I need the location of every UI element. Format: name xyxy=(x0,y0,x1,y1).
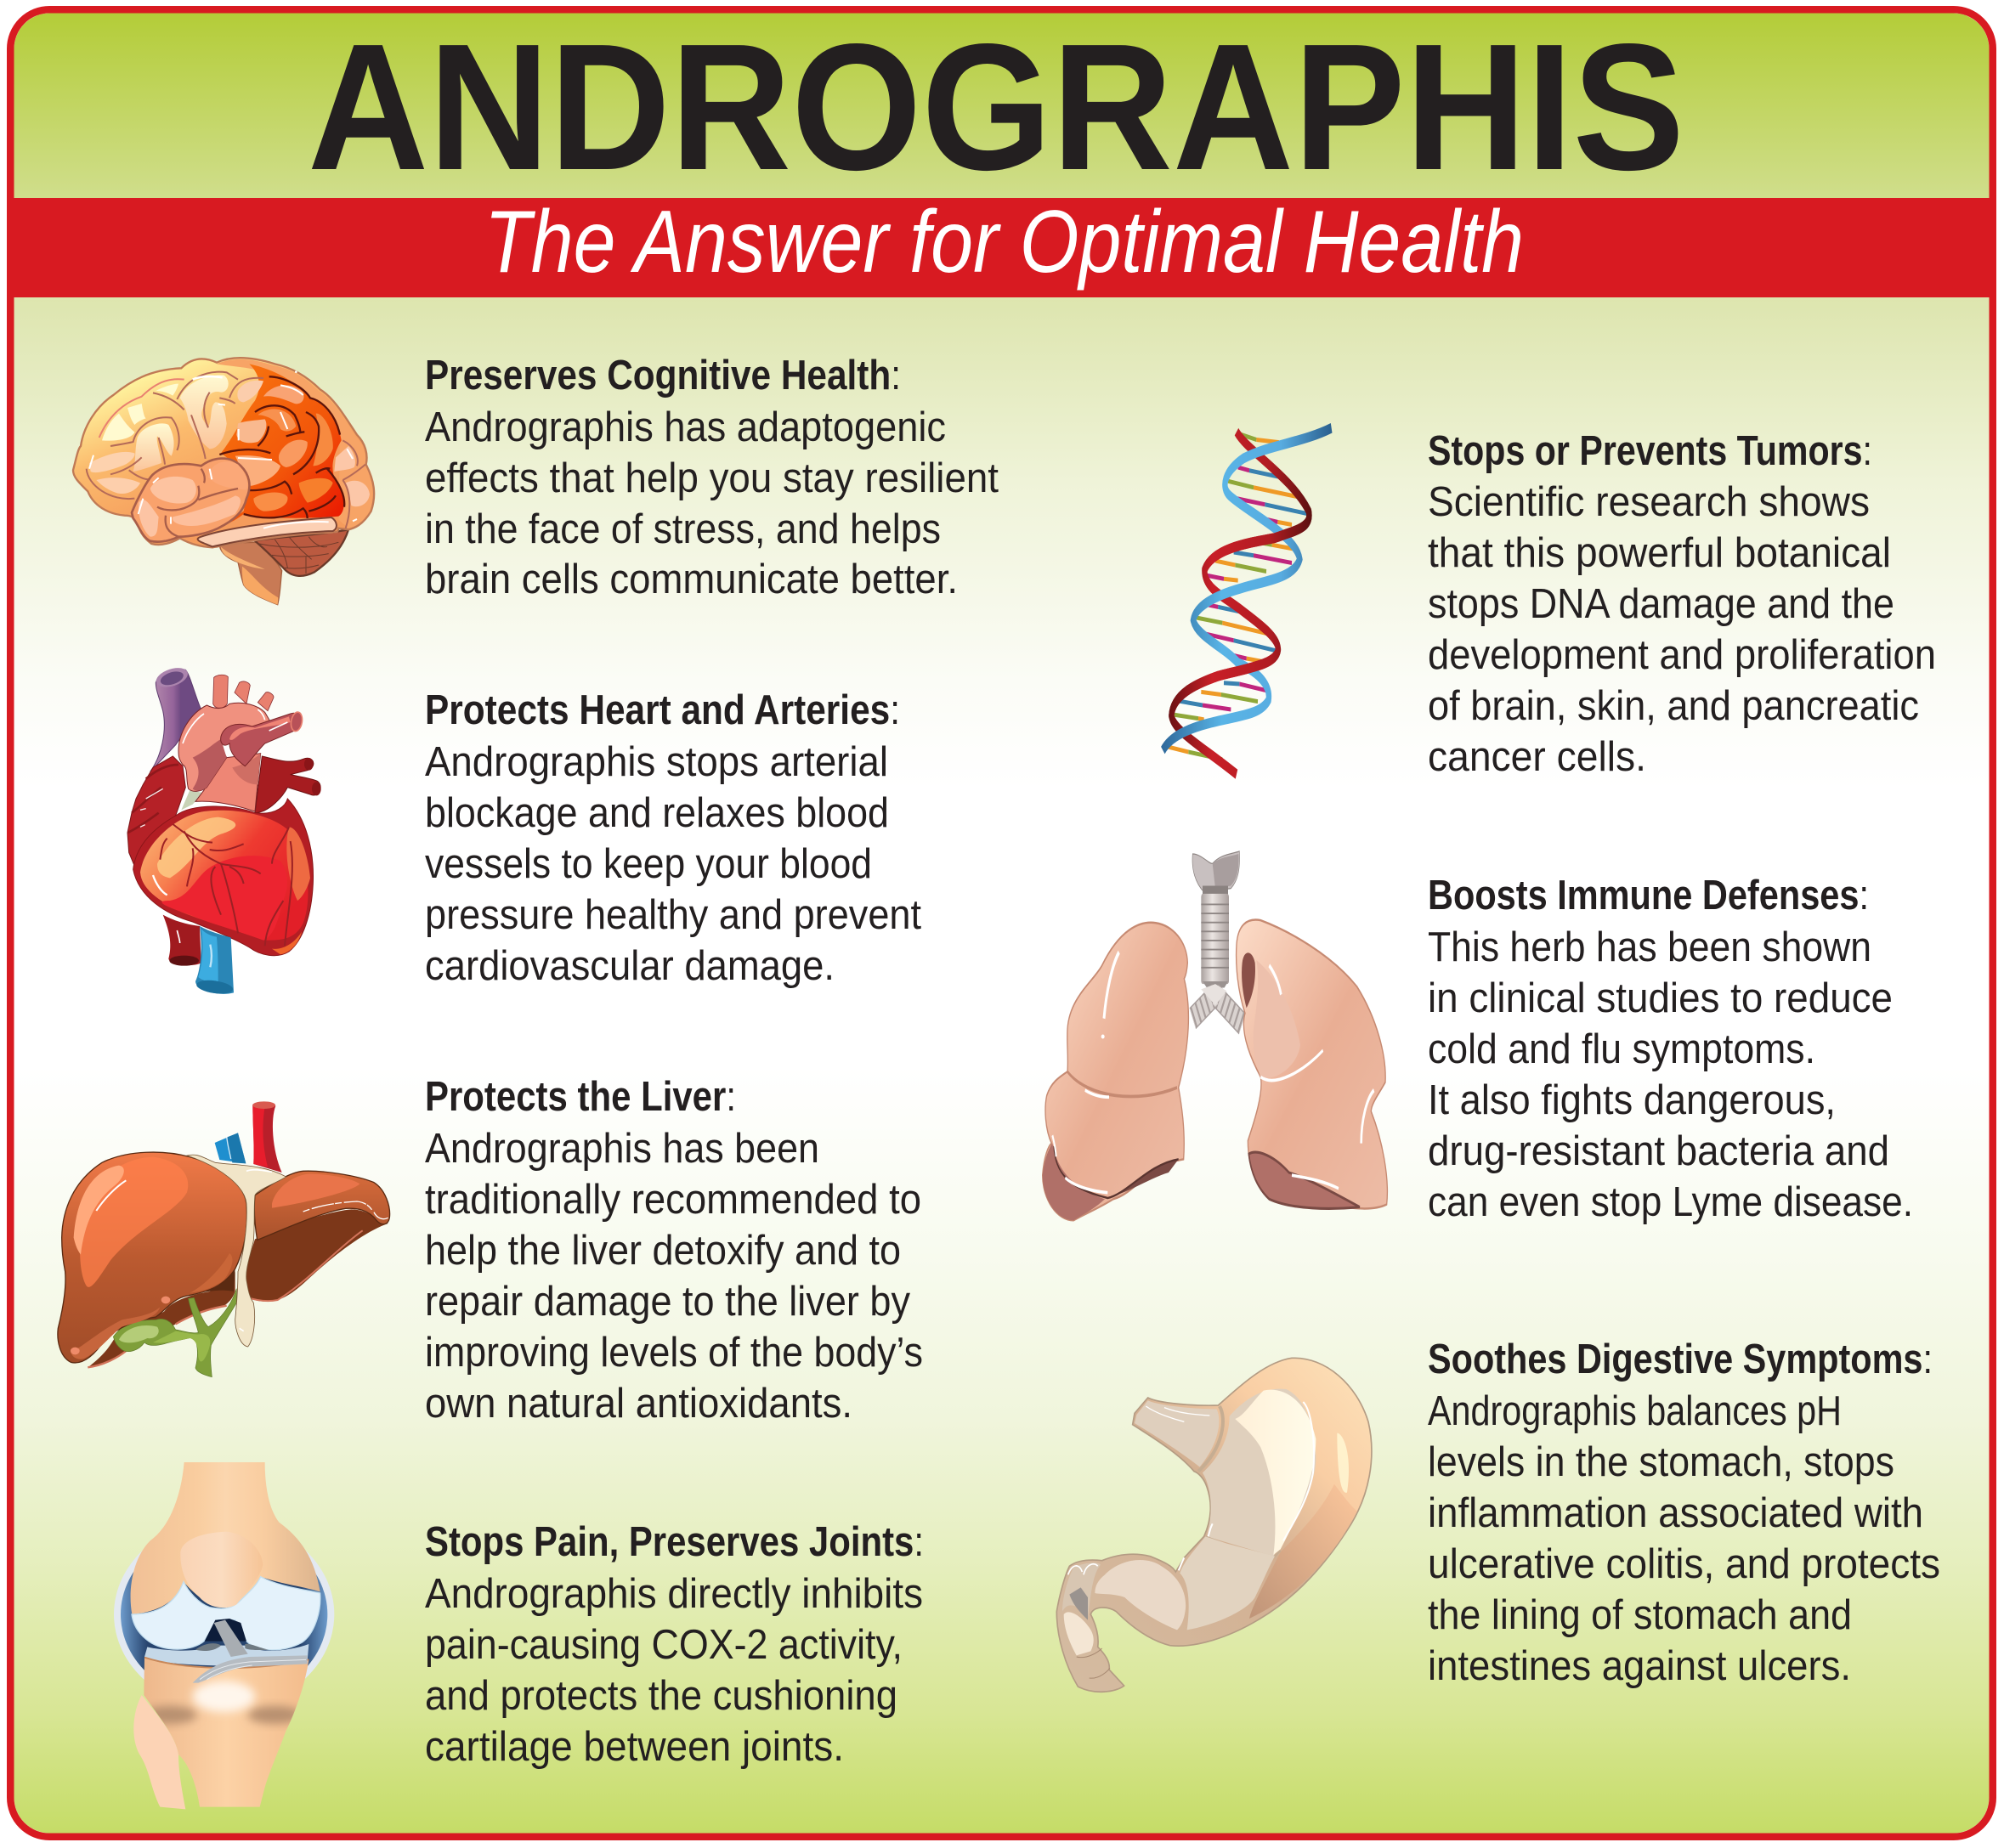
panel: immune defenses xyxy=(1043,851,1913,1225)
text: digestive symptoms xyxy=(1428,1337,1940,1689)
panel: tumors xyxy=(1163,428,1936,780)
text: heart and arteries: cardiovascular damage. xyxy=(425,943,835,989)
text: heart and arteries: blockage and relaxes blood xyxy=(425,790,889,836)
text: digestive symptoms: Andrographis balances pH xyxy=(1428,1388,1842,1434)
subtitle band: The Answer for Optimal Health xyxy=(484,193,1524,291)
subtitle band xyxy=(7,193,1996,297)
text: joints: pain-causing COX-2 activity, xyxy=(425,1622,903,1668)
text: heart and arteries: vessels to keep your blood xyxy=(425,841,872,887)
text: digestive symptoms: ulcerative colitis, and protects xyxy=(1428,1541,1940,1587)
text: heart and arteries: Protects Heart and Arteries: xyxy=(425,687,900,733)
panel: heart and arteries xyxy=(127,664,921,996)
text: tumors: of brain, skin, and pancreatic xyxy=(1428,683,1919,729)
text: immune defenses: cold and flu symptoms. xyxy=(1428,1026,1815,1072)
panel: joints xyxy=(114,1462,924,1809)
text: liver: repair damage to the liver by xyxy=(425,1279,910,1325)
text: cognitive health xyxy=(425,353,999,602)
text: cognitive health: in the face of stress, and helps xyxy=(425,506,941,552)
text: joints xyxy=(425,1519,924,1770)
text: liver: traditionally recommended to xyxy=(425,1177,921,1223)
title: ANDROGRAPHIS xyxy=(308,6,1684,207)
text: liver xyxy=(425,1074,923,1427)
text: digestive symptoms: intestines against ulcers. xyxy=(1428,1643,1851,1689)
text: tumors: stops DNA damage and the xyxy=(1428,581,1894,627)
text: joints: cartilage between joints. xyxy=(425,1724,844,1770)
text: liver: improving levels of the body’s xyxy=(425,1330,923,1376)
text: cognitive health: brain cells communicate better. xyxy=(425,557,958,602)
text: immune defenses: in clinical studies to reduce xyxy=(1428,975,1893,1021)
text: digestive symptoms: Soothes Digestive Symptoms: xyxy=(1428,1337,1933,1382)
text: tumors xyxy=(1428,428,1936,780)
text: liver: Protects the Liver: xyxy=(425,1074,736,1120)
text: digestive symptoms: inflammation associated with xyxy=(1428,1490,1923,1536)
icon: liver xyxy=(58,1101,390,1377)
text: immune defenses xyxy=(1428,873,1913,1225)
text: immune defenses: Boosts Immune Defenses: xyxy=(1428,873,1869,918)
icon: knee joint xyxy=(114,1462,334,1809)
text: cognitive health: effects that help you stay resilient xyxy=(425,455,999,501)
icon: lungs xyxy=(1043,851,1387,1220)
text: immune defenses: It also fights dangerous, xyxy=(1428,1077,1836,1123)
text: digestive symptoms: the lining of stomach and xyxy=(1428,1592,1852,1638)
text: digestive symptoms: levels in the stomach, stops xyxy=(1428,1439,1894,1485)
panel: cognitive health xyxy=(73,353,999,605)
text: heart and arteries: Andrographis stops arterial xyxy=(425,739,888,785)
text: immune defenses: drug-resistant bacteria and xyxy=(1428,1128,1889,1174)
text: cognitive health: Andrographis has adaptogenic xyxy=(425,404,946,450)
text: tumors: that this powerful botanical xyxy=(1428,530,1891,576)
icon: brain xyxy=(73,358,374,605)
text: joints: Stops Pain, Preserves Joints: xyxy=(425,1519,924,1565)
text: liver: own natural antioxidants. xyxy=(425,1381,852,1427)
text: joints: Andrographis directly inhibits xyxy=(425,1571,923,1617)
text: tumors: Stops or Prevents Tumors: xyxy=(1428,428,1872,474)
text: cognitive health: Preserves Cognitive Health: xyxy=(425,353,901,398)
text: immune defenses: can even stop Lyme disease. xyxy=(1428,1179,1913,1225)
icon: DNA helix xyxy=(1163,428,1332,774)
text: heart and arteries: pressure healthy and prevent xyxy=(425,892,921,938)
panel: digestive symptoms xyxy=(1056,1337,1940,1692)
text: heart and arteries xyxy=(425,687,921,989)
text: joints: and protects the cushioning xyxy=(425,1673,897,1719)
text: immune defenses: This herb has been shown xyxy=(1428,924,1871,970)
panel: liver xyxy=(58,1074,923,1427)
text: tumors: development and proliferation xyxy=(1428,632,1936,678)
text: tumors: cancer cells. xyxy=(1428,734,1646,780)
text: tumors: Scientific research shows xyxy=(1428,479,1870,525)
text: liver: help the liver detoxify and to xyxy=(425,1228,901,1274)
text: liver: Andrographis has been xyxy=(425,1126,819,1172)
icon: heart xyxy=(127,664,321,996)
icon: stomach xyxy=(1056,1358,1372,1692)
